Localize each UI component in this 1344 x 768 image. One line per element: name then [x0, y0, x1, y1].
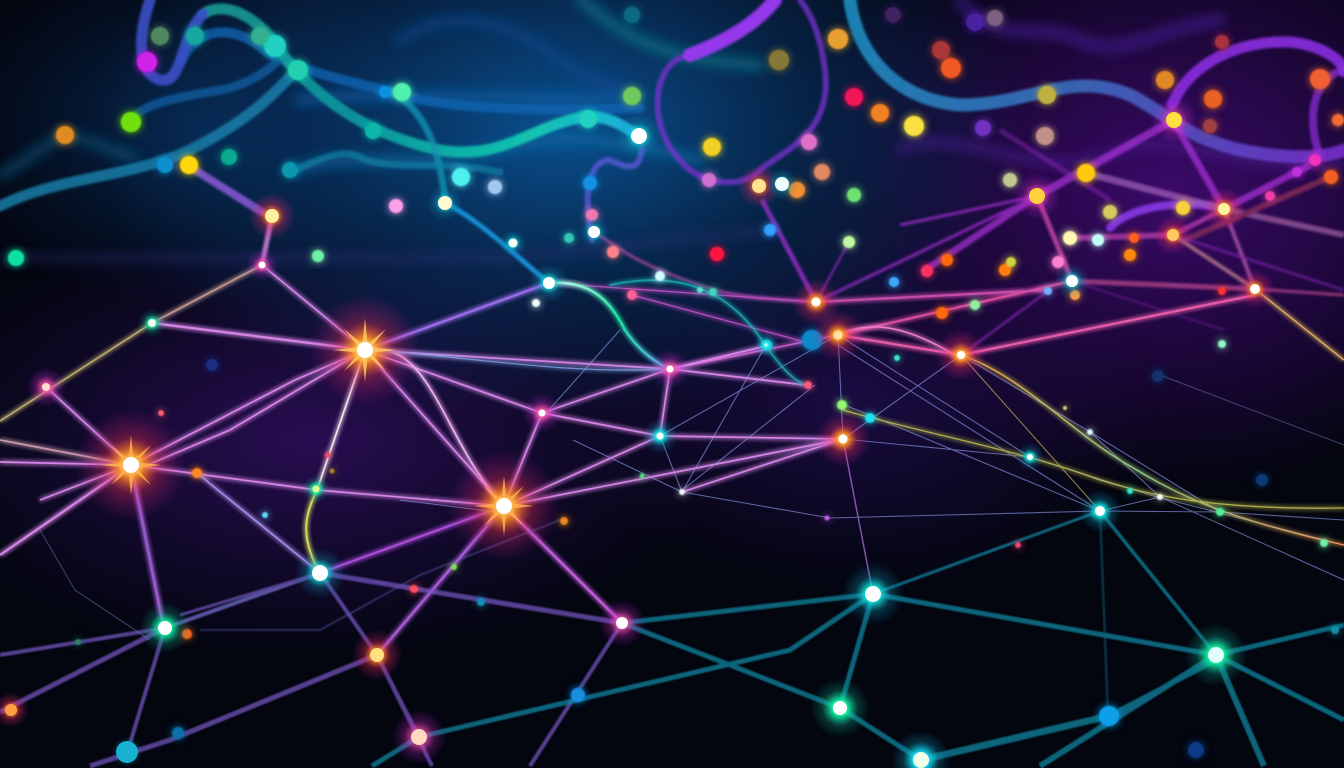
bokeh dots: upper area [8, 7, 1344, 361]
curve: gold arc lower [843, 410, 1344, 508]
beam: pink curve [592, 230, 816, 302]
node: left star [309, 294, 421, 406]
beam: blue descent [445, 203, 549, 283]
tube: blue right [850, 0, 1344, 157]
curve: gold arc [961, 355, 1344, 545]
soft background tubes [0, 0, 1344, 258]
network lines: center blue-violet web [0, 330, 1344, 640]
tube: purple center [658, 0, 826, 182]
beam: pink drop [262, 216, 272, 265]
tube: cyan descent [392, 92, 445, 200]
tube: right arc [1110, 204, 1226, 228]
tube: purple bright [690, 0, 775, 55]
curved accent lines [306, 280, 1344, 570]
node: cool nodes [111, 112, 1248, 768]
tube: teal ribbon [203, 9, 640, 152]
network lines: left star bursts [0, 265, 843, 655]
glowing tubes at top [0, 0, 1344, 302]
tube: second blue ribbon [182, 32, 640, 109]
tube: mid cyan [290, 154, 500, 172]
small nodes: lower area [75, 359, 1339, 758]
network lines: upper right magenta beams [762, 120, 1344, 355]
node: far left star [75, 409, 187, 521]
curve: blue arc [610, 280, 805, 385]
tube: small blue-purple hook [588, 148, 642, 240]
node: center star [448, 450, 560, 562]
node: bottom cyan glow [891, 730, 951, 768]
beam: violet to node [195, 170, 262, 212]
tube: purple right [1172, 42, 1344, 105]
tube: blue-purple hook [141, 0, 203, 80]
tube: left secondary [133, 64, 275, 118]
curve: green arc [549, 283, 668, 368]
tube: purple right loop [1313, 70, 1344, 150]
network lines: bright pink upper links [549, 281, 1344, 369]
network lines: lower teal and violet beams [0, 470, 1344, 766]
curve: pink arc [838, 327, 961, 358]
tube: blue left [0, 70, 296, 206]
